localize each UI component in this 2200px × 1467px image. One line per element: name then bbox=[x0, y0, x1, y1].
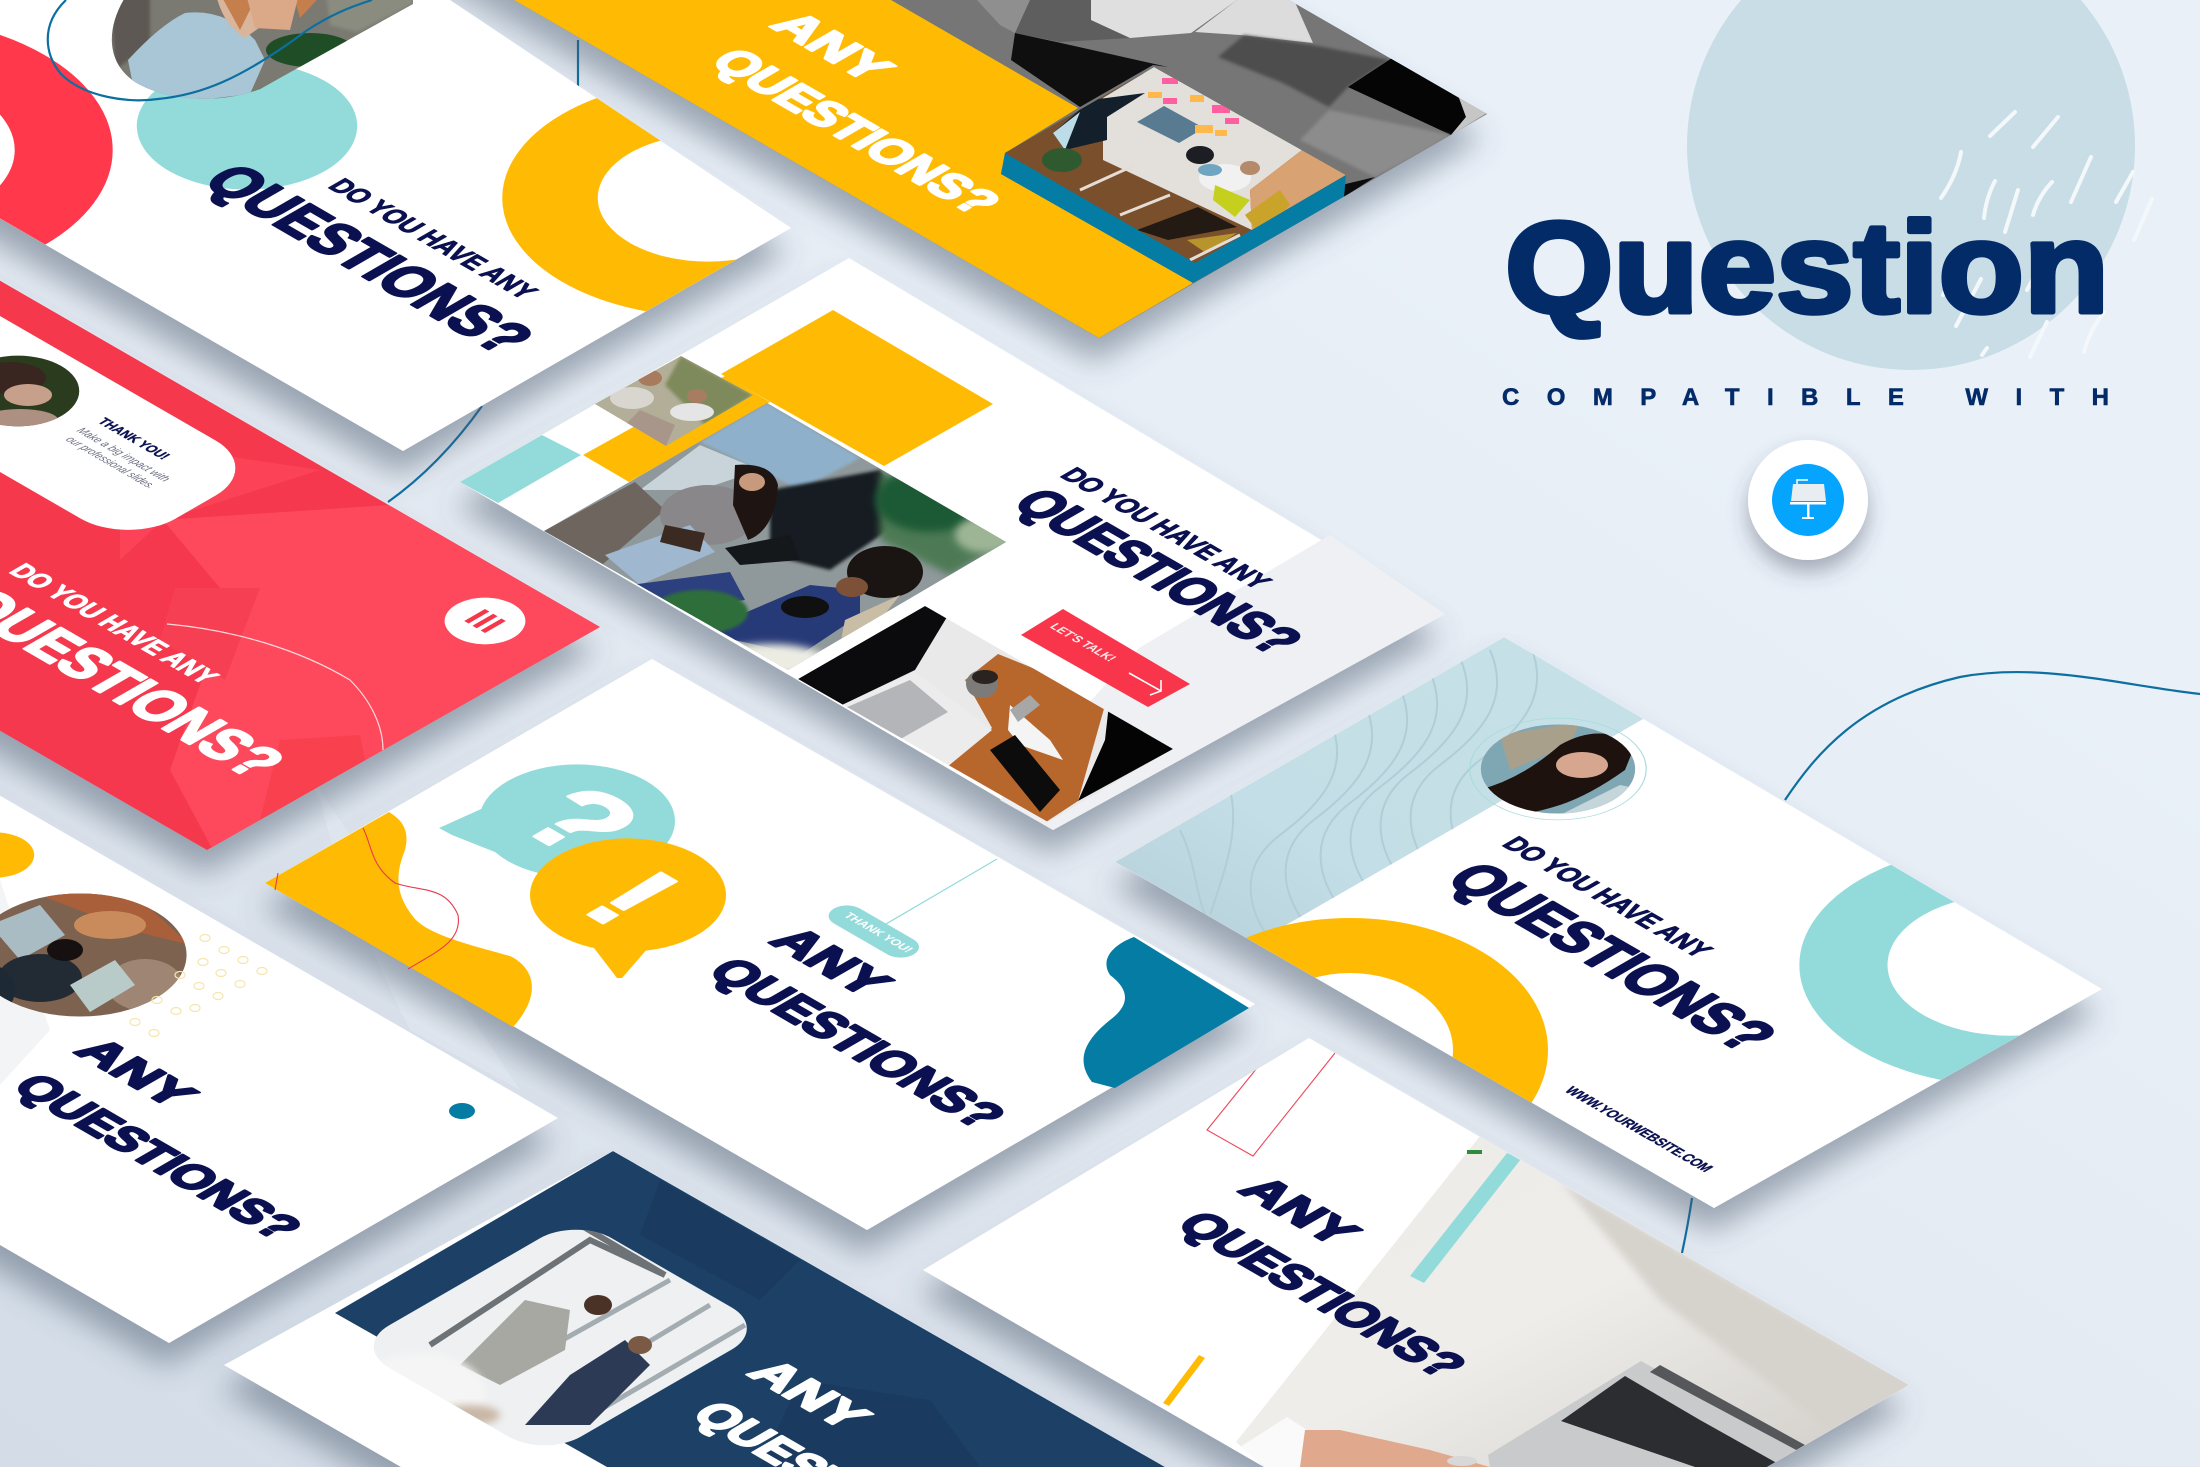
text: do you have any questions: QUESTIONS? bbox=[1001, 481, 1315, 663]
text: do you have any questions: DO YOU HAVE ANY bbox=[1054, 463, 1278, 593]
icon: yellow exclamation bubble: ! bbox=[556, 854, 709, 942]
big yellow square bbox=[721, 310, 993, 466]
text: any questions: ANY bbox=[1227, 1170, 1370, 1253]
blue band bbox=[1001, 67, 1346, 283]
panel: red slide: Make a big impact with bbox=[73, 425, 174, 484]
red outline bbox=[1207, 1053, 1335, 1156]
text: any questions: ANY bbox=[758, 919, 904, 1004]
big pale circle bbox=[1687, 0, 2135, 370]
panel: teal-top slide bbox=[1115, 637, 2200, 1208]
icon: teal question bubble: ? bbox=[489, 768, 671, 874]
small yellow square bbox=[583, 376, 770, 482]
panel: navy slide bbox=[224, 1151, 1165, 1467]
icon: yellow exclamation bubble bbox=[489, 815, 767, 978]
grey side band bbox=[0, 880, 50, 1085]
red button: LET'S TALK! bbox=[1046, 621, 1120, 664]
icon: teal question bubble bbox=[438, 741, 716, 901]
avatar ring bbox=[1469, 718, 1647, 820]
photo: desk background bbox=[1230, 1130, 1920, 1467]
yellow field bbox=[513, 0, 1193, 338]
menu button bbox=[444, 598, 526, 644]
avatar bbox=[0, 356, 80, 426]
panel: speech bubble slide bbox=[265, 659, 1255, 1230]
text: any questions bbox=[680, 1353, 881, 1467]
text: any questions: QUESTIONS? bbox=[1165, 1205, 1477, 1385]
card text: THANK YOU! bbox=[94, 415, 174, 462]
teal ellipse bbox=[136, 69, 358, 190]
teal square bbox=[460, 435, 581, 503]
title: Question bbox=[1505, 196, 2109, 340]
red ring bbox=[0, 34, 113, 244]
icon: keynote badge bbox=[1748, 440, 1868, 560]
panel: yellow slide with photos bbox=[400, 0, 1487, 338]
photo: desk with laptop bbox=[795, 600, 1180, 825]
photo: team at laptops bbox=[0, 890, 190, 1020]
colored meeting photo bbox=[1000, 60, 1350, 270]
thin red curve bbox=[275, 828, 458, 969]
photo: team at office bbox=[540, 400, 1015, 676]
panel: collage slide bbox=[460, 258, 1445, 830]
yellow blob bbox=[265, 812, 532, 1027]
laptop bbox=[1488, 1361, 1804, 1467]
text: any questions: QUESTIONS? bbox=[2, 1066, 314, 1247]
green accent bbox=[1467, 1150, 1482, 1154]
text: any questions: QUESTIONS? bbox=[699, 42, 1011, 222]
teal ring bbox=[1774, 829, 2200, 1101]
woman photo bbox=[112, 0, 413, 99]
navy field bbox=[335, 1151, 1165, 1467]
subtitle: COMPATIBLE WITH bbox=[1502, 384, 2109, 411]
text: do you have any questions: DO YOU HAVE ANY bbox=[322, 174, 545, 303]
text: any questions: ANY bbox=[736, 1353, 881, 1437]
text: do you have any questions: DO YOU HAVE ANY bbox=[3, 559, 226, 688]
faint glass shape bbox=[300, 760, 520, 1090]
text: any questions: ANY bbox=[759, 5, 904, 89]
white rain strokes bbox=[1941, 112, 2152, 357]
yellow dot bbox=[0, 823, 50, 887]
text: do you have any questions: QUESTIONS? bbox=[1433, 853, 1791, 1061]
avatar photo bbox=[1475, 720, 1645, 820]
yellow bar bbox=[1163, 1355, 1205, 1406]
lighter building shapes bbox=[163, 505, 600, 850]
teal bar bbox=[1410, 1153, 1521, 1283]
panel: white slide with circular photo bbox=[0, 738, 558, 1343]
panel: laptop slide bbox=[923, 1038, 1920, 1467]
teal dot bbox=[449, 1103, 475, 1119]
yellow ring bbox=[1152, 918, 1548, 1182]
connector curves behind slides bbox=[388, 40, 2200, 1253]
hand and sleeve bbox=[1240, 1417, 1310, 1467]
website text: WWW.YOURWEBSITE.COM bbox=[1561, 1084, 1716, 1175]
grey corner band bbox=[1000, 535, 1445, 830]
thank you pill bbox=[821, 901, 927, 962]
text: do you have any questions: QUESTIONS? bbox=[190, 155, 548, 363]
thin arc bbox=[167, 624, 383, 750]
white card bbox=[0, 316, 236, 530]
thin blue loop bbox=[48, 0, 372, 100]
teal textured area bbox=[1115, 637, 1645, 943]
text: any questions: ANY bbox=[64, 1030, 209, 1114]
photo: two men with laptop bbox=[595, 356, 753, 446]
text: any questions: QUESTIONS? bbox=[696, 950, 1018, 1136]
thank you pill: THANK YOU! bbox=[840, 910, 917, 955]
b/w photo bbox=[977, 0, 1487, 197]
teal connector line bbox=[886, 859, 997, 924]
panel: white slide with yellow arc bbox=[0, 0, 931, 451]
text: do you have any questions: DO YOU HAVE ANY bbox=[1496, 832, 1719, 962]
photo: handshake at window bbox=[340, 1210, 760, 1467]
yellow ring bbox=[502, 98, 736, 312]
blue blob bbox=[1084, 937, 1249, 1088]
panel: red slide bbox=[0, 223, 600, 850]
decorative dots bbox=[130, 934, 267, 1036]
text: do you have any questions bbox=[0, 562, 282, 774]
red button bbox=[1021, 609, 1190, 707]
panel: red slide: our professional slides. bbox=[62, 434, 159, 491]
